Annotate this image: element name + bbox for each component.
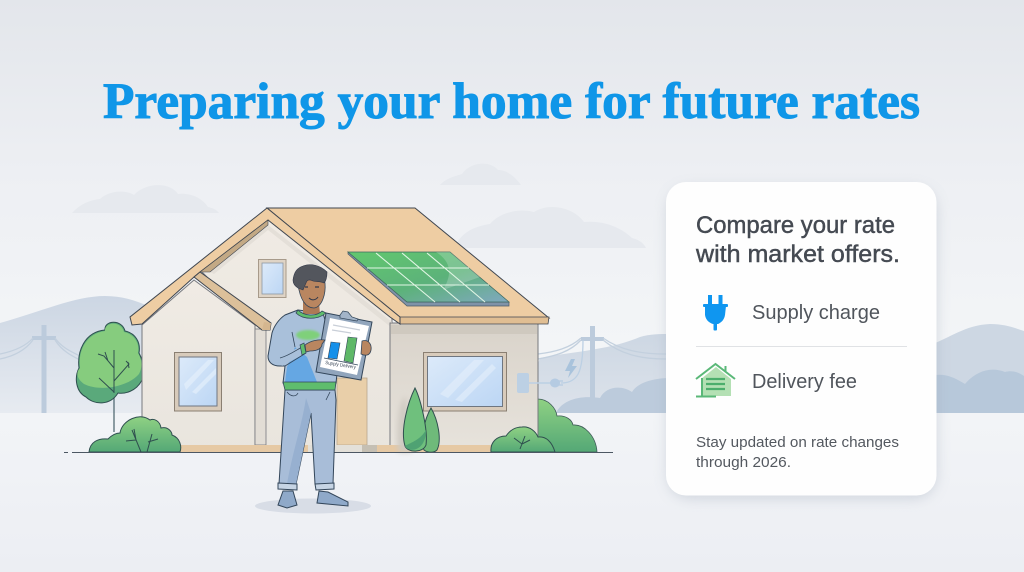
collar: [296, 310, 326, 318]
bush: right small: [491, 427, 555, 452]
shoes: [278, 491, 297, 508]
main roof: [267, 208, 549, 318]
bush: right behind house: [538, 399, 597, 452]
window: attic: [258, 260, 286, 298]
utility pole: right: [538, 326, 666, 402]
heading: Preparing your home for future rates: [103, 74, 920, 130]
bush: left: [89, 417, 181, 452]
small gable arm: [194, 272, 271, 330]
gable shadow on wall: [210, 225, 392, 328]
house: [130, 208, 549, 452]
label: supply charge: Supply charge: [752, 301, 880, 324]
solar panel: [348, 252, 509, 306]
card heading: Compare your rate: [696, 212, 895, 239]
hills: [0, 296, 1024, 413]
panel: compare card: [666, 182, 936, 496]
forearm: [276, 346, 306, 366]
icon: plug: [703, 295, 728, 330]
cuffs: [278, 483, 297, 490]
neck: [303, 302, 320, 314]
card heading: [695, 212, 900, 268]
label: delivery fee: Delivery fee: [752, 370, 857, 393]
right wall: [390, 323, 538, 452]
window: left: [174, 352, 222, 411]
card shadow: [668, 188, 936, 498]
icon: lightning bolt: [565, 359, 577, 378]
card footnote: through 2026.: [696, 454, 791, 471]
icon: house: [696, 364, 735, 396]
sweater: [268, 310, 338, 383]
hands: [305, 340, 325, 352]
gable inner board: [200, 220, 268, 272]
card footnote: Stay updated on rate changes: [696, 434, 899, 451]
card heading: with market offers.: [695, 241, 900, 268]
hair: [293, 265, 327, 290]
hem: [283, 382, 336, 390]
door: [337, 378, 367, 445]
card footnote: [696, 434, 899, 471]
cypress shrubs: [397, 388, 439, 452]
person with clipboard: [255, 265, 372, 514]
divider: [696, 346, 907, 347]
plug cable and wire to pole: [529, 340, 583, 388]
left gable wall: [142, 280, 255, 452]
main wall: [202, 218, 392, 452]
utility pole: left: [0, 325, 80, 413]
window: right: [424, 352, 506, 411]
ground line: [64, 452, 613, 454]
clouds: [72, 164, 646, 248]
clipboard: Supply Delivery: [325, 360, 357, 371]
clipboard: [316, 311, 372, 380]
tree: left: [76, 322, 143, 432]
head: [298, 276, 325, 308]
foundation strip: [180, 445, 492, 452]
electric meter: [517, 373, 529, 393]
face: [305, 286, 319, 288]
ground shadow: [255, 498, 371, 514]
front gable trim: [130, 208, 400, 325]
roof shadow on right wall: [391, 325, 537, 334]
trousers: [279, 390, 336, 484]
